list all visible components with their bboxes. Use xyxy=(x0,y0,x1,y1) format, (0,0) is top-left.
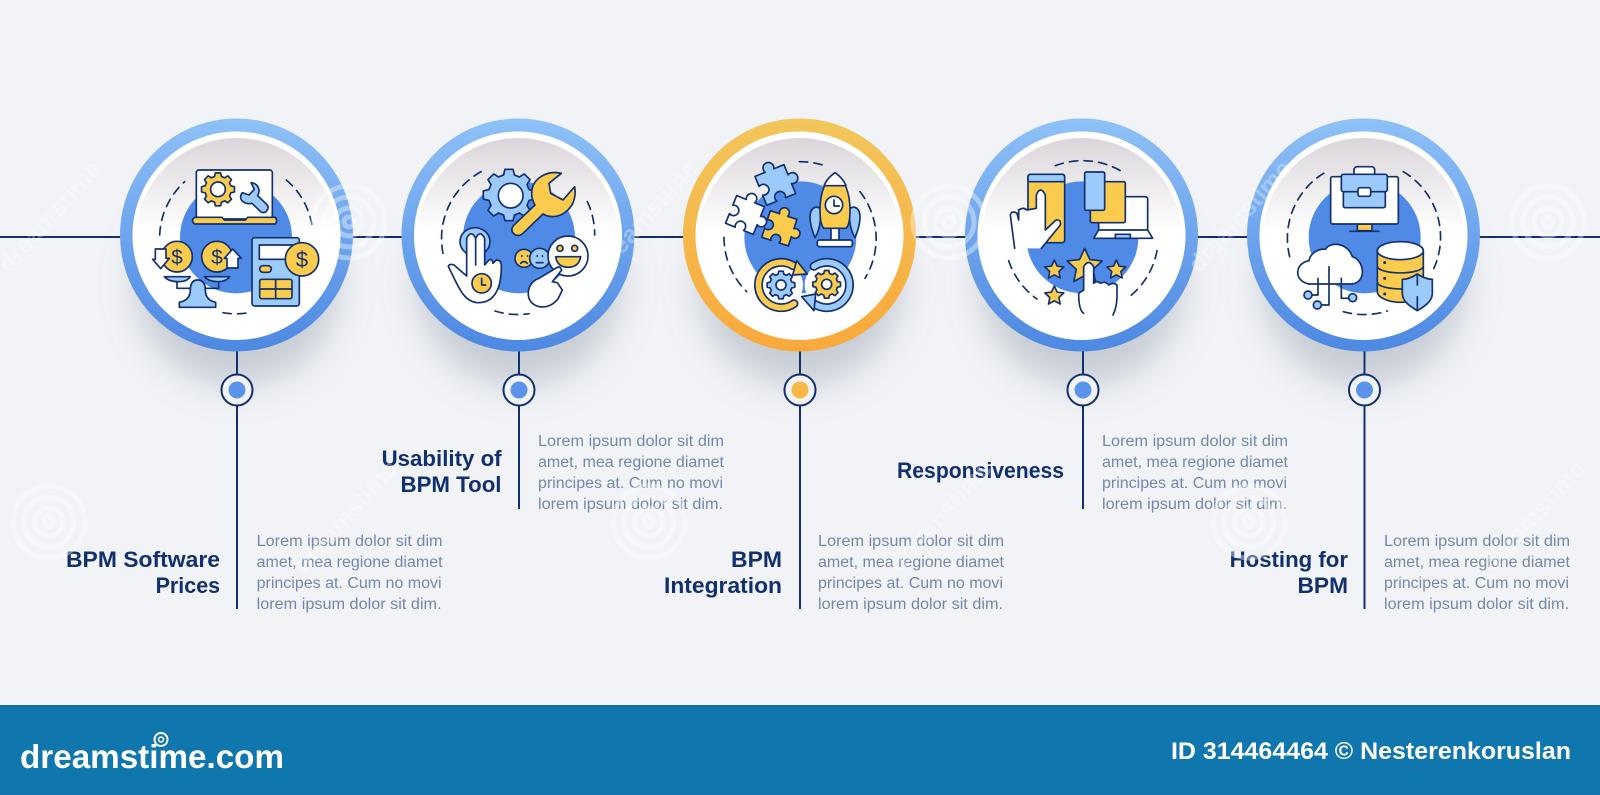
text block xyxy=(1384,533,1571,613)
text block: lorem ipsum dolor sit dim. xyxy=(1384,596,1569,613)
text block: amet, mea regione diamet xyxy=(1384,554,1571,571)
watermark text: dreamstime xyxy=(883,455,997,578)
image credit: ID 314464464 © Nesterenkoruslan xyxy=(1171,738,1571,765)
ring xyxy=(965,118,1198,352)
panel: Usability of BPM Tool xyxy=(382,118,725,513)
connector with node xyxy=(1349,350,1380,609)
heading: BPM xyxy=(731,547,782,572)
heading: Usability of xyxy=(382,446,502,471)
heading: Prices xyxy=(156,573,220,598)
text block: lorem ipsum dolor sit dim. xyxy=(538,496,723,513)
panel: Responsiveness xyxy=(897,118,1289,513)
ring xyxy=(683,118,916,352)
heading: BPM Software xyxy=(66,547,220,572)
inner disc xyxy=(132,132,340,340)
text block: Lorem ipsum dolor sit dim xyxy=(818,533,1004,550)
heading: Integration xyxy=(664,573,782,598)
text block: Lorem ipsum dolor sit dim xyxy=(1102,433,1288,450)
icon: prices: $ xyxy=(211,246,223,269)
connector with node xyxy=(1068,350,1098,509)
drop shadow xyxy=(980,182,1184,386)
heading: BPM Tool xyxy=(400,472,502,497)
connector with node xyxy=(784,350,816,609)
text block: lorem ipsum dolor sit dim. xyxy=(1102,496,1287,513)
text block: Lorem ipsum dolor sit dim xyxy=(257,533,443,550)
heading xyxy=(382,446,502,497)
heading xyxy=(1230,547,1348,598)
heading xyxy=(66,547,220,598)
icon: prices xyxy=(153,170,319,314)
watermark text xyxy=(0,155,1591,578)
drop shadow xyxy=(417,182,621,386)
footer logo: dreamstime.com xyxy=(20,738,284,775)
drop shadow xyxy=(1262,182,1466,386)
watermark text: dreamstime xyxy=(1477,455,1591,578)
connector with node xyxy=(222,350,252,609)
text block: principes at. Cum no movi xyxy=(818,575,1003,592)
text block: principes at. Cum no movi xyxy=(538,475,723,492)
text block: lorem ipsum dolor sit dim. xyxy=(257,596,442,613)
inner disc xyxy=(1260,132,1468,340)
text block xyxy=(818,533,1005,613)
icon: prices: $ xyxy=(171,246,183,269)
text block xyxy=(1102,433,1289,513)
watermark text: dreamstime xyxy=(289,455,403,578)
text block: Lorem ipsum dolor sit dim xyxy=(1384,533,1570,550)
icon: hosting xyxy=(1287,167,1441,315)
icon: responsiveness xyxy=(1009,161,1157,315)
panel: BPM Integration xyxy=(664,118,1005,613)
ring xyxy=(1247,118,1480,352)
text block xyxy=(538,433,725,513)
connector with node xyxy=(504,350,534,509)
drop shadow xyxy=(698,182,902,386)
icon: prices: $ xyxy=(296,247,308,272)
ring xyxy=(120,118,353,352)
footer bar xyxy=(0,705,1600,795)
heading: Hosting for xyxy=(1230,547,1348,572)
icon: integration xyxy=(724,154,876,311)
text block: principes at. Cum no movi xyxy=(1384,575,1569,592)
panel: BPM Software Prices xyxy=(66,118,443,613)
timeline line xyxy=(0,236,1600,238)
watermark text: dreamstime xyxy=(1183,155,1297,278)
drop shadow xyxy=(135,182,339,386)
text block: principes at. Cum no movi xyxy=(257,575,442,592)
text block: principes at. Cum no movi xyxy=(1102,475,1287,492)
icon: usability xyxy=(442,169,595,314)
text block: amet, mea regione diamet xyxy=(1102,454,1289,471)
heading: Responsiveness xyxy=(897,458,1064,483)
heading xyxy=(664,547,782,598)
ring xyxy=(402,118,634,352)
heading: BPM xyxy=(1298,573,1348,598)
text block xyxy=(257,533,443,613)
text block: amet, mea regione diamet xyxy=(538,454,725,471)
inner disc xyxy=(978,132,1186,340)
text block: amet, mea regione diamet xyxy=(257,554,443,571)
text block: lorem ipsum dolor sit dim. xyxy=(818,596,1003,613)
text block: amet, mea regione diamet xyxy=(818,554,1005,571)
panel: Hosting for BPM xyxy=(1230,118,1571,613)
watermark text: dreamstime xyxy=(589,155,703,278)
watermark swirls xyxy=(13,186,1584,558)
inner disc xyxy=(414,132,622,340)
text block: Lorem ipsum dolor sit dim xyxy=(538,433,724,450)
inner disc xyxy=(696,132,904,340)
